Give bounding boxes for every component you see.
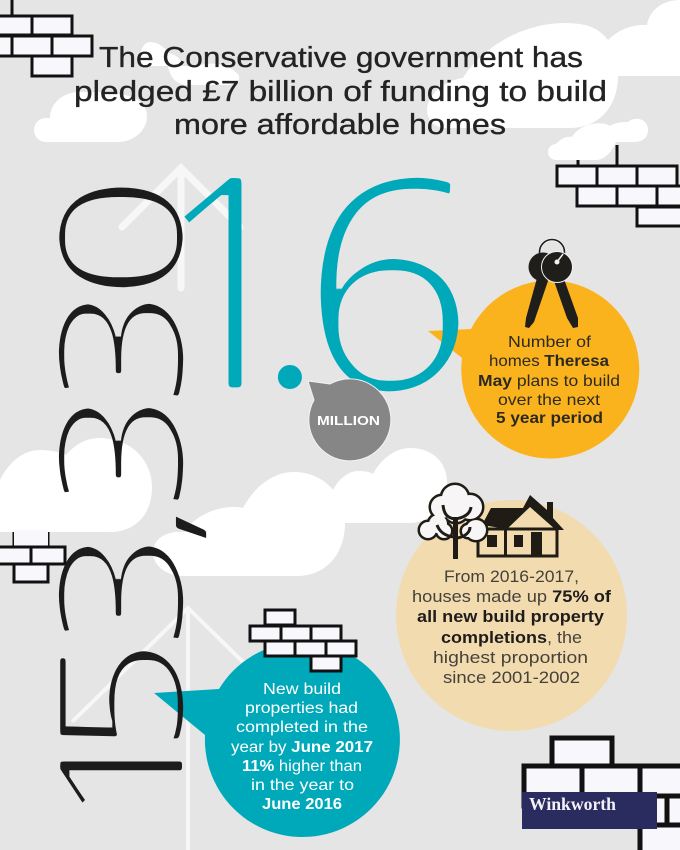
bubble: grey million bbox=[308, 379, 391, 461]
title: pledged £7 billion of funding to build bbox=[74, 76, 607, 108]
text: pale bubble: since 2001-2002 bbox=[443, 669, 580, 687]
bubble: yellow homes stat bbox=[428, 280, 639, 458]
bricks: top left bbox=[0, 0, 92, 76]
logo: Winkworth: Winkworth bbox=[529, 794, 616, 814]
bubble: pale house stat bbox=[396, 500, 627, 731]
text: yellow bubble: over the next bbox=[498, 392, 601, 409]
bubble: grey million: MILLION bbox=[317, 413, 380, 428]
icon: house and tree bbox=[420, 485, 564, 559]
icon: keys bbox=[525, 240, 578, 328]
bubble: teal new-build stat bbox=[154, 642, 400, 837]
text: yellow bubble bbox=[478, 334, 620, 427]
logo: Winkworth bbox=[522, 792, 657, 829]
text: teal bubble: completed in the bbox=[236, 719, 368, 736]
text: pale bubble: all new build property bbox=[417, 608, 605, 626]
bricks: centre bbox=[250, 610, 356, 671]
bricks: bottom right bbox=[524, 738, 680, 850]
title bbox=[74, 42, 607, 141]
text: teal bubble bbox=[231, 681, 373, 813]
text: pale bubble: houses made up 75% of bbox=[412, 588, 612, 606]
arrow: bottom bbox=[72, 608, 245, 850]
text: teal bubble: properties had bbox=[245, 700, 358, 717]
big number: 1.6 million: 6 bbox=[298, 144, 477, 435]
big number: 1.6 million bbox=[138, 142, 477, 435]
arrow: top bbox=[122, 168, 240, 288]
text: pale bubble bbox=[412, 568, 612, 687]
bricks: top right bbox=[557, 145, 680, 226]
text: yellow bubble: 5 year period bbox=[496, 410, 603, 427]
big number: 1.6 million: . bbox=[252, 173, 325, 413]
bricks: left bbox=[0, 530, 65, 582]
text: teal bubble: in the year to bbox=[251, 777, 354, 794]
text: yellow bubble: homes Theresa bbox=[489, 353, 609, 370]
title: more affordable homes bbox=[174, 109, 506, 141]
text: pale bubble: completions , the bbox=[441, 629, 582, 647]
text: yellow bubble: May plans to build bbox=[478, 373, 620, 390]
text: teal bubble: New build bbox=[263, 681, 341, 698]
text: pale bubble: highest proportion bbox=[433, 649, 588, 667]
big number: 153,330: 153,330 bbox=[39, 173, 208, 838]
text: teal bubble: 11% higher than bbox=[242, 758, 362, 775]
big number: 1.6 million: 1 bbox=[138, 142, 314, 432]
text: teal bubble: June 2016 bbox=[262, 796, 342, 813]
text: pale bubble: From 2016-2017, bbox=[444, 568, 579, 586]
text: teal bubble: year by June 2017 bbox=[231, 739, 373, 756]
text: yellow bubble: Number of bbox=[508, 334, 592, 351]
clouds bbox=[0, 0, 680, 576]
title: The Conservative government has bbox=[99, 42, 583, 74]
